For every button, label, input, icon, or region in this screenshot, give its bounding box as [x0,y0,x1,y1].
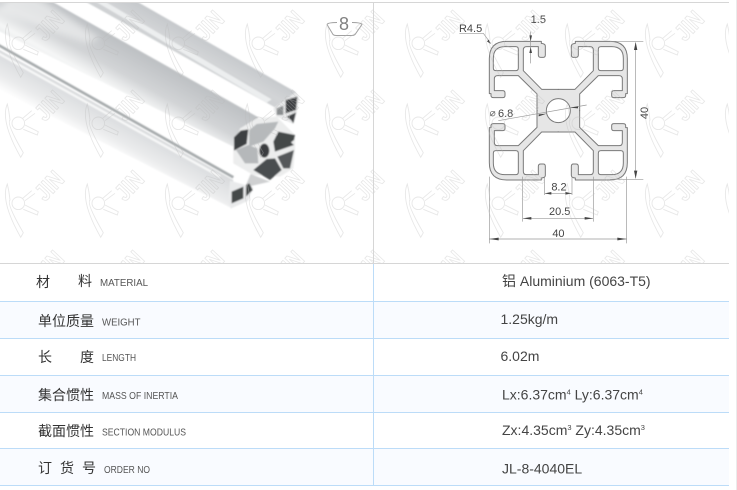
profile: aluminium section [489,41,627,180]
row: section modulus: Zx:4.35cm [502,422,567,438]
row backgrounds [0,302,729,485]
highlight: soft streak on middle face [0,0,100,43]
end face: top corner [273,93,299,124]
icon: series 8 slot badge: 8 [339,14,349,34]
end face: central cross-section [233,117,295,187]
row: mass of inertia: MASS OF INERTIA [102,390,178,402]
extrusion body with soft photographic edges [0,0,299,209]
row divider lines [0,264,729,486]
label: width 40: 40 [552,228,565,240]
row: order number: ORDER NO [104,464,150,476]
row: order number: JL-8-4040EL [502,460,582,476]
row: order number: 货 [60,460,74,476]
row: length [38,348,539,365]
row: material: 材 [36,274,50,290]
row: section modulus: 3 [641,423,645,432]
ridge: lower groove line [0,44,233,177]
row: mass of inertia: 集合惯性 [38,387,94,403]
panel: product photo [0,0,299,209]
label: bore diameter 6.8 [490,108,513,120]
end face: bottom corner [228,181,253,209]
row: mass of inertia [38,386,643,403]
row: weight: 1.25kg/m [500,311,558,327]
label: slot depth width 20.5: 20.5 [549,206,570,218]
row: material [36,273,651,290]
band: top highlight stripe [87,0,272,103]
row: section modulus [38,422,645,439]
band: lower face of extrusion [0,48,233,207]
dimension lines [459,32,643,243]
row: material: 铝 Aluminium (6063-T5) [502,273,651,289]
row: material: 料 [78,273,92,289]
row: length: LENGTH [102,352,136,364]
label: bore diameter 6.8: 6.8 [498,108,513,120]
label: height 40: 40 [639,107,651,119]
row: order number: 订 [38,460,52,476]
dimension arrows [487,35,637,240]
row: length: 长 [38,349,52,365]
row: mass of inertia: Lx:6.37cm [502,386,567,402]
row: mass of inertia: 4 [639,388,643,396]
row: length: 度 [80,349,94,365]
icon: series 8 slot badge [327,14,362,36]
row: material: MATERIAL [100,277,148,289]
watermark pattern [0,3,729,263]
row: length: 6.02m [500,348,539,364]
row: order number [38,460,582,476]
label: tab thickness 1.5: 1.5 [531,14,546,26]
panel: profile cross-section drawing [459,14,651,243]
ridge: thin highlight line under groove [0,52,220,177]
row: order number: 号 [82,460,96,476]
row: section modulus: Zy:4.35cm [572,422,641,438]
label: corner radius R4.5: R4.5 [459,23,482,35]
row: weight: 单位质量 [38,313,94,329]
row: section modulus: 3 [567,423,572,432]
table: specifications [0,264,729,486]
band: middle face of extrusion [0,0,258,147]
label: slot width 8.2: 8.2 [551,182,567,194]
row: section modulus: 截面惯性 [38,423,94,439]
row: mass of inertia: Ly:6.37cm [571,386,639,402]
row: weight [38,311,558,329]
band: top face of extrusion [77,0,298,108]
row: section modulus: SECTION MODULUS [102,426,186,438]
row: mass of inertia: 4 [567,388,571,396]
row: weight: WEIGHT [102,316,141,328]
